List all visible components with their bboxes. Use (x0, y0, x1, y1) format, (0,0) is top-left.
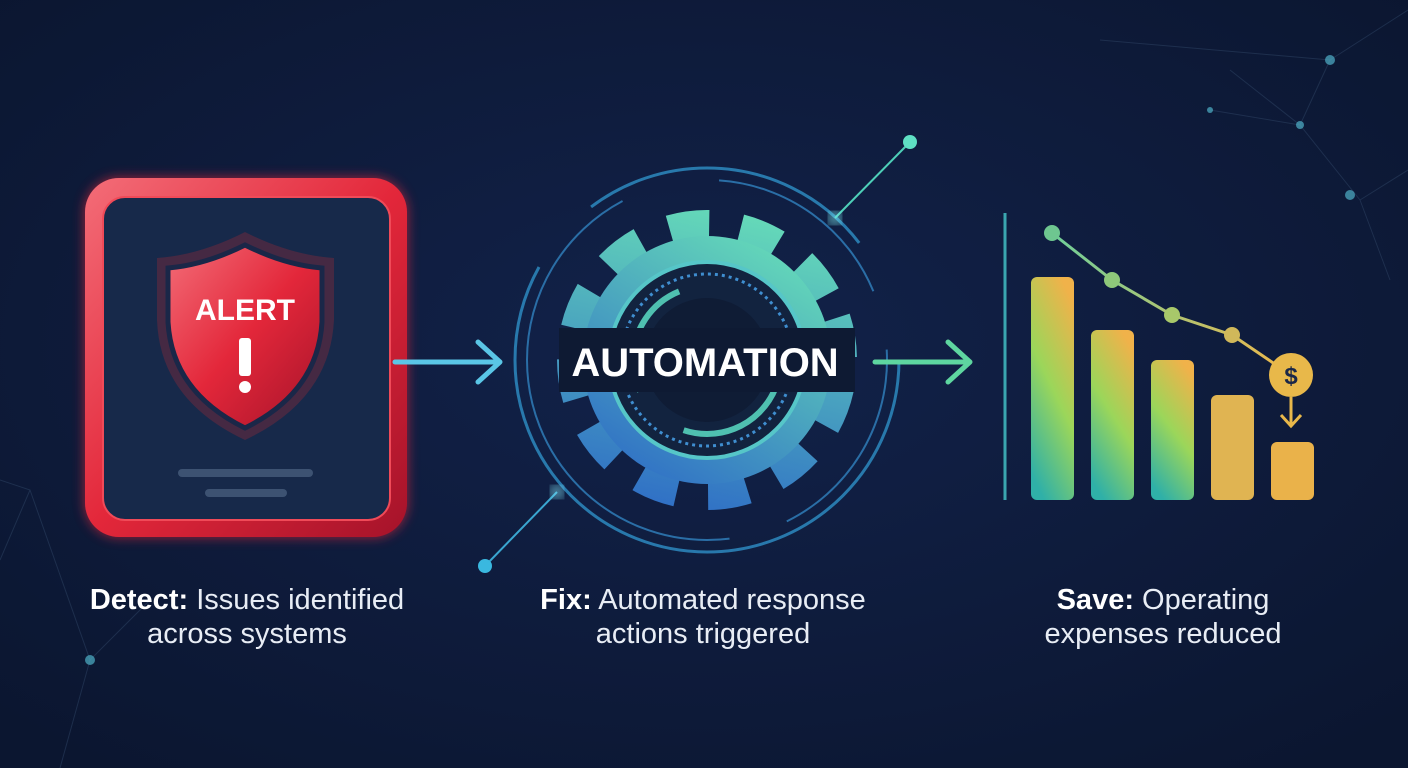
caption: save: expenses reduced (1044, 618, 1282, 650)
icon: alert shield: ALERT (195, 294, 295, 327)
caption: fix: Fix: Automated response (540, 584, 866, 616)
arrow: fix to save (872, 340, 972, 384)
caption: fix: actions triggered (596, 618, 810, 650)
trend line (1044, 225, 1291, 375)
caption: fix (540, 584, 866, 650)
panel: automation gear (478, 135, 917, 573)
panel: automation gear: AUTOMATION (571, 341, 839, 385)
arrow: detect to fix (392, 340, 502, 384)
icon: dollar coin (1269, 353, 1313, 426)
panel: detect alert card (76, 169, 416, 546)
chart: cost reduction bars (1004, 213, 1314, 500)
icon: alert shield (157, 232, 334, 440)
caption: save: Save: Operating (1057, 584, 1269, 616)
icon: dollar coin: $ (1284, 363, 1298, 390)
caption: detect: Detect: Issues identified (90, 584, 404, 616)
caption: detect: across systems (147, 618, 347, 650)
caption: save (1044, 584, 1282, 650)
caption: detect (90, 584, 404, 650)
